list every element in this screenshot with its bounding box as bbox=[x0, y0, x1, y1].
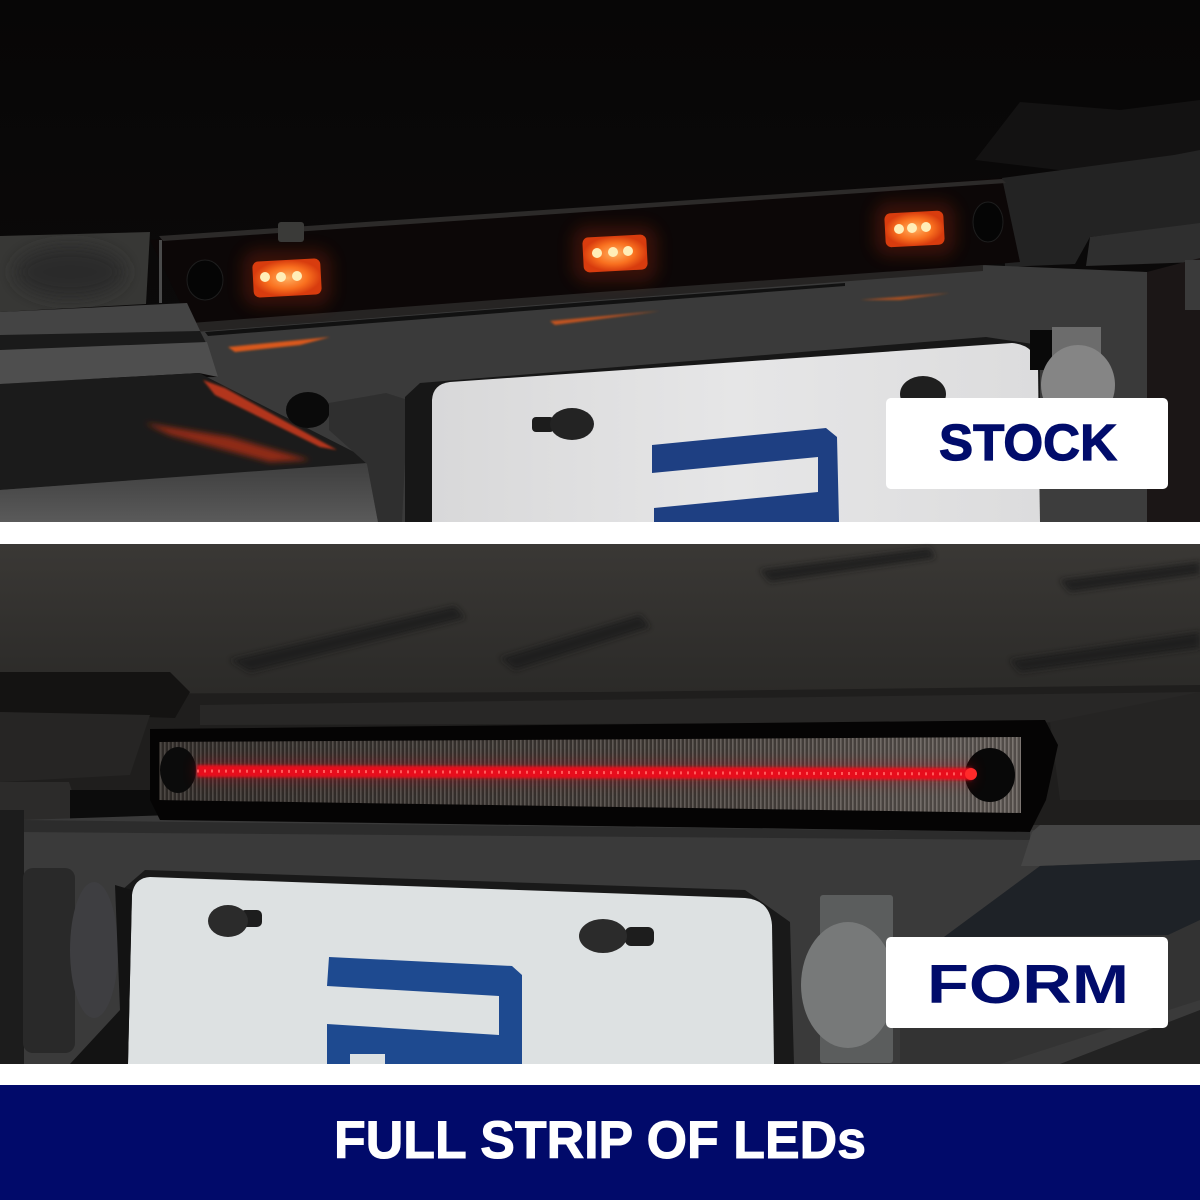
left bumper bbox=[0, 303, 378, 522]
label: FORM: FORM bbox=[927, 953, 1129, 1015]
plate logo bbox=[652, 428, 839, 522]
plate knobs bbox=[532, 417, 554, 432]
label: FORM bbox=[886, 937, 1168, 1028]
tailgate body bbox=[0, 815, 1200, 1064]
plate mount and hole bbox=[286, 392, 330, 428]
screws bbox=[160, 747, 196, 793]
LED housing bbox=[150, 720, 1058, 832]
stock LED lamps bbox=[243, 202, 955, 306]
ceiling streaks bbox=[230, 548, 1200, 672]
plate logo bbox=[327, 957, 522, 1064]
label: STOCK bbox=[886, 398, 1168, 489]
plate knobs bbox=[240, 910, 262, 927]
license plate: stock bbox=[405, 337, 1040, 522]
plug cap: form bbox=[801, 895, 895, 1063]
label: STOCK: STOCK bbox=[939, 414, 1117, 471]
plug cap: stock bbox=[1030, 327, 1115, 425]
panel: stock photo bbox=[0, 0, 1200, 522]
stock light housing bbox=[150, 178, 1020, 336]
screws bbox=[187, 260, 223, 300]
reflected amber glow bbox=[228, 337, 330, 352]
banner: headline bbox=[0, 1085, 1200, 1200]
left latch bbox=[23, 868, 132, 1064]
license plate: form bbox=[120, 870, 794, 1064]
ribbed lens bbox=[159, 737, 1021, 813]
tailgate body bbox=[0, 265, 1147, 522]
underside shelf bbox=[0, 685, 1200, 825]
LED strip bbox=[197, 762, 977, 783]
banner: headline: FULL STRIP OF LEDs bbox=[334, 1111, 866, 1170]
panel: form photo bbox=[0, 544, 1200, 1064]
